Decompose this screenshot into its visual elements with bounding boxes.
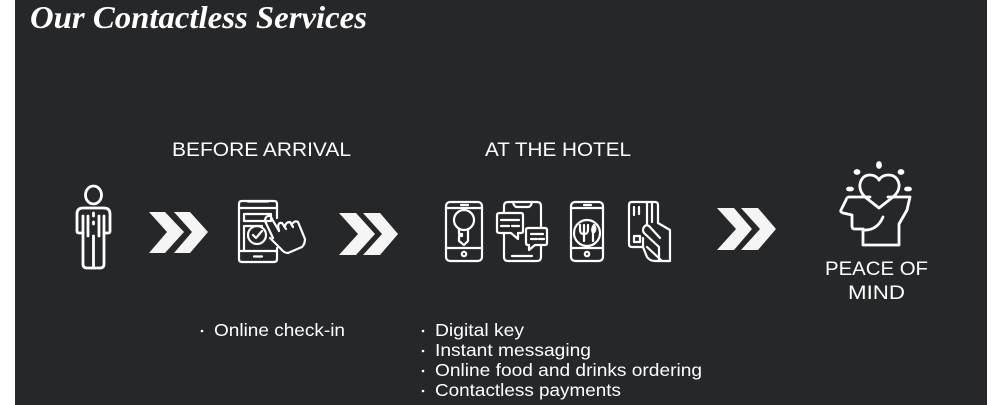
heading: at the hotel: AT THE HOTEL [485,140,631,161]
title: Our Contactless Services [30,0,367,35]
label: peace of mind: PEACE OF [825,259,928,280]
arrow: first chevrons [149,212,208,253]
icon: phone with instant messaging [497,202,547,261]
icon: phone with online check-in [239,201,305,262]
text block: at the hotel services: Online food and drinks ordering [435,360,702,380]
icon: hand holding contactless card [629,202,670,261]
label: peace of mind [825,259,928,304]
icon: phone with digital key [446,202,482,261]
icon: guest figure [77,186,110,268]
text block: at the hotel services: Instant messaging [435,340,591,360]
heading: before arrival: BEFORE ARRIVAL [172,140,351,161]
text block: at the hotel services: Digital key [435,320,524,340]
arrow: third chevrons [717,208,776,250]
text block: before arrival services: Online check-in [214,320,345,340]
text block: at the hotel services [422,320,702,400]
icon: phone with food ordering [571,202,603,261]
label: peace of mind: MIND [848,283,905,304]
arrow: second chevrons [339,213,398,255]
text block: at the hotel services: Contactless payments [435,380,621,400]
icon: heart and head, peace of mind [841,162,910,245]
